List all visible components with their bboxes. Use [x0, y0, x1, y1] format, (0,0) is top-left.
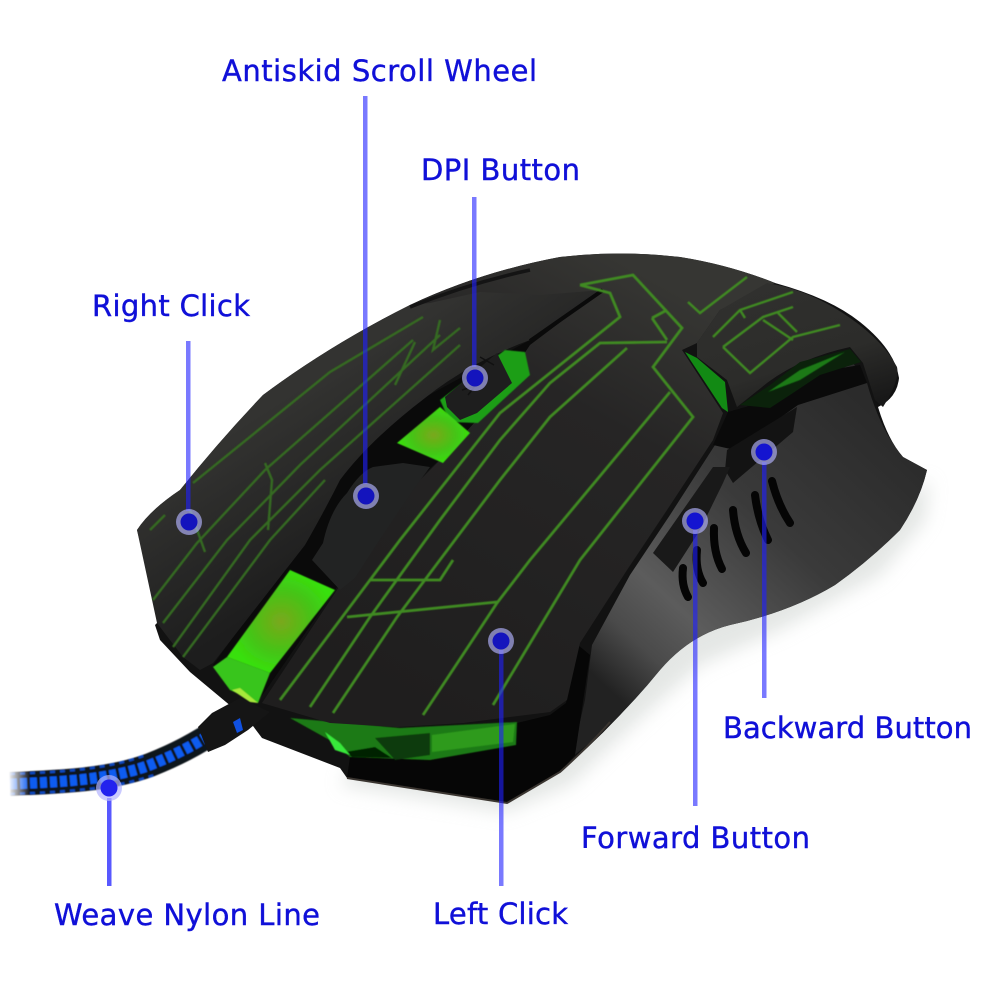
- label: weave nylon line: Weave Nylon Line: [54, 898, 320, 932]
- front green glow band: [290, 718, 517, 760]
- marker: [96, 775, 122, 801]
- right click plate: [137, 290, 603, 670]
- label: left click: Left Click: [433, 897, 568, 931]
- channel seam: [530, 290, 603, 341]
- marker: [353, 483, 379, 509]
- label: antiskid scroll wheel: Antiskid Scroll Wheel: [222, 54, 537, 88]
- mouse body silhouette: [137, 254, 927, 803]
- marker: [488, 628, 514, 654]
- label: right click: Right Click: [92, 289, 250, 323]
- label: backward button: Backward Button: [723, 711, 972, 745]
- marker: [682, 508, 708, 534]
- green light piece front: [213, 570, 335, 703]
- leader line: [762, 462, 766, 698]
- label: forward button: Forward Button: [581, 821, 810, 855]
- center channel: [213, 290, 620, 703]
- upper shell and left click plate: [262, 254, 775, 727]
- callout: antiskid scroll wheel: [222, 54, 537, 509]
- label: dpi button: DPI Button: [421, 153, 580, 187]
- side vents: [683, 481, 790, 597]
- callout: left click: [433, 628, 568, 931]
- right click circuit lines: [150, 317, 460, 657]
- rear hump shell: [697, 283, 897, 407]
- dpi button light: [440, 350, 530, 423]
- black gap under rear shell: [713, 365, 867, 450]
- callout: weave nylon line: [54, 775, 320, 932]
- cable connector: [198, 698, 270, 752]
- braided nylon cable: [5, 727, 222, 805]
- leader line: [186, 341, 190, 511]
- leader line: [363, 96, 368, 484]
- marker: [462, 365, 488, 391]
- leader line: [472, 197, 476, 367]
- dpi button: [445, 353, 512, 420]
- antiskid scroll wheel: [312, 463, 430, 590]
- base black rim: [347, 645, 590, 803]
- marker: [751, 439, 777, 465]
- leader line: [107, 798, 112, 886]
- side panel: [572, 363, 927, 757]
- leader line: [693, 530, 698, 806]
- backward button: [725, 407, 797, 483]
- callout: forward button: [581, 508, 810, 855]
- top seam: [410, 270, 530, 307]
- left click circuit lines: [280, 275, 693, 715]
- leader line: [499, 650, 504, 886]
- mouse photo illustration: [5, 254, 930, 812]
- ground shadow: [340, 480, 930, 812]
- callout: right click: [92, 289, 250, 535]
- callout: dpi button: [421, 153, 580, 391]
- rear shell circuit lines: [688, 277, 840, 373]
- dpi button markings: [462, 357, 494, 395]
- callout: backward button: [723, 439, 972, 745]
- rear green light: [740, 349, 861, 408]
- marker: [176, 509, 202, 535]
- forward button: [653, 467, 730, 572]
- green light piece near dpi button: [397, 407, 470, 463]
